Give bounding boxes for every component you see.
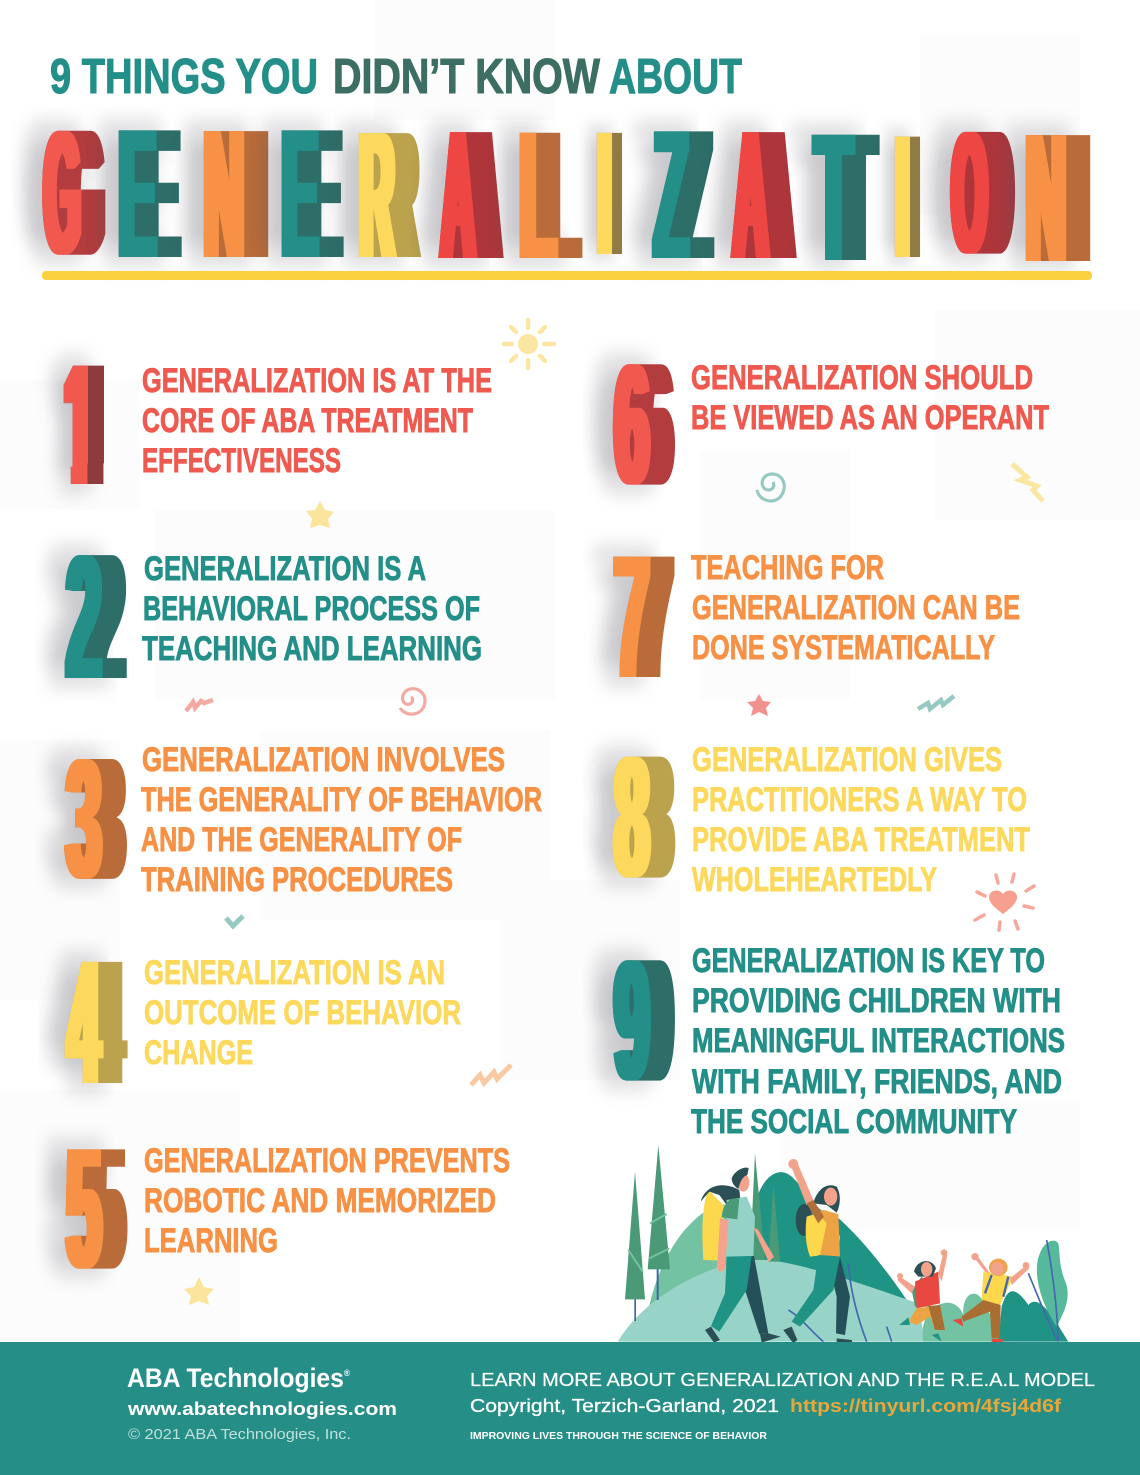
item 6 text [691, 359, 1049, 437]
item 5 text: LEARNING [144, 1222, 278, 1260]
item 9 text [691, 942, 1065, 1141]
item 3 [66, 724, 542, 913]
item 7 text: GENERALIZATION CAN BE [692, 589, 1020, 627]
icon: check [226, 916, 243, 926]
footer: website: www.abatechnologies.com [127, 1399, 397, 1419]
item 1 text: GENERALIZATION IS AT THE [142, 362, 492, 400]
item 6 text: GENERALIZATION SHOULD [691, 359, 1033, 397]
footer: tagline: IMPROVING LIVES THROUGH THE SCIENCE OF BEHAVIOR [470, 1430, 767, 1442]
item 7 text [691, 549, 1020, 667]
item 1 [64, 330, 492, 522]
item 8 text: GENERALIZATION GIVES [692, 741, 1002, 779]
item 6 [614, 330, 1049, 520]
icon: heart sun [975, 874, 1034, 930]
item 5 [66, 1113, 510, 1304]
item 7 text: TEACHING FOR [691, 549, 884, 587]
item 4 text: GENERALIZATION IS AN [144, 954, 445, 992]
icon: zigzag yellow [1012, 464, 1043, 501]
item 2 text [142, 550, 482, 668]
footer band [0, 1342, 1140, 1475]
item 1 text [142, 362, 492, 480]
3D word: GENERALIZATION: G [44, 96, 80, 291]
number 9: 9 [614, 926, 649, 1116]
footer: ABA logo text: ABA Technologies [127, 1363, 364, 1393]
3D word: GENERALIZATION: A [441, 94, 475, 298]
icon: sun [504, 320, 554, 368]
icon: star pink [747, 694, 771, 716]
number 6: 6 [614, 330, 649, 520]
icon: zigzag teal [918, 696, 954, 709]
title [50, 50, 742, 104]
item 3 text: THE GENERALITY OF BEHAVIOR [141, 781, 542, 819]
3D word: GENERALIZATION: Z [654, 91, 688, 297]
number 2: 2 [66, 518, 101, 715]
number 8: 8 [614, 722, 649, 913]
icon: star yellow [306, 501, 334, 528]
item 3 text: AND THE GENERALITY OF [141, 821, 462, 859]
item 8 text: PROVIDE ABA TREATMENT [692, 821, 1030, 859]
icon: spiral pink [400, 689, 425, 714]
item 3 text [141, 741, 542, 899]
item 8 text [692, 741, 1030, 899]
3D word: GENERALIZATION: A [733, 94, 768, 298]
item 8 text: WHOLEHEARTEDLY [692, 861, 937, 899]
footer: copyright author: Copyright, Terzich-Garland, 2021 [470, 1396, 779, 1416]
yellow underline [42, 271, 1092, 280]
number 7: 7 [614, 519, 649, 714]
item 2 text: BEHAVIORAL PROCESS OF [143, 590, 480, 628]
3D word: GENERALIZATION: O [952, 96, 987, 289]
man hiker [701, 1168, 781, 1343]
3D word: GENERALIZATION: T [815, 95, 852, 299]
item 2 [66, 518, 482, 715]
3D word: GENERALIZATION [44, 90, 1066, 300]
hills and trees [618, 1145, 1068, 1342]
item 4 text: CHANGE [144, 1034, 253, 1072]
footer: copyright: © 2021 ABA Technologies, Inc. [128, 1426, 351, 1443]
footer: ABA logo text: ® [344, 1368, 350, 1378]
title: ABOUT [609, 50, 742, 104]
woman hiker [783, 1159, 853, 1343]
item 5 text [144, 1142, 510, 1260]
3D word: GENERALIZATION: I [598, 96, 611, 292]
3D word: GENERALIZATION: N [1026, 96, 1066, 300]
boy [953, 1253, 1029, 1343]
number 1: 1 [64, 330, 94, 522]
girl [897, 1249, 947, 1342]
item 7 text: DONE SYSTEMATICALLY [692, 629, 995, 667]
item 3 text: GENERALIZATION INVOLVES [142, 741, 505, 779]
number 4: 4 [68, 923, 100, 1121]
3D word: GENERALIZATION: R [360, 94, 394, 295]
number 3: 3 [66, 724, 101, 913]
item 8 [614, 722, 1030, 913]
footer: learn more: LEARN MORE ABOUT GENERALIZATION AND THE R.E.A.L MODEL [470, 1370, 1095, 1390]
item 5 text: ROBOTIC AND MEMORIZED [144, 1182, 496, 1220]
item 9 text: THE SOCIAL COMMUNITY [691, 1103, 1017, 1141]
number 5: 5 [66, 1113, 101, 1304]
3D word: GENERALIZATION: I [896, 101, 909, 295]
item 4 [68, 923, 461, 1121]
illustration: hikers [618, 1145, 1068, 1343]
item 5 text: GENERALIZATION PREVENTS [144, 1142, 510, 1180]
3D word: GENERALIZATION: E [282, 90, 318, 296]
item 8 text: PRACTITIONERS A WAY TO [692, 781, 1027, 819]
item 4 text [144, 954, 461, 1072]
title: 9 THINGS YOU [50, 50, 318, 104]
item 2 text: GENERALIZATION IS A [144, 550, 426, 588]
icon: star yellow lower [184, 1277, 214, 1305]
3D word: GENERALIZATION: L [520, 93, 556, 297]
icon: squiggle pink [186, 700, 213, 711]
item 7 [614, 519, 1020, 714]
item 2 text: TEACHING AND LEARNING [142, 630, 482, 668]
item 1 text: CORE OF ABA TREATMENT [142, 402, 473, 440]
icon: zigzag orange [471, 1065, 511, 1085]
title: DIDN’T KNOW [333, 50, 601, 104]
icon: spiral teal [757, 474, 784, 501]
3D word: GENERALIZATION: E [119, 90, 156, 296]
item 3 text: TRAINING PROCEDURES [141, 861, 453, 899]
item 1 text: EFFECTIVENESS [142, 442, 341, 480]
item 4 text: OUTCOME OF BEHAVIOR [144, 994, 461, 1032]
item 9 [614, 926, 1065, 1141]
footer: link: https://tinyurl.com/4fsj4d6f [790, 1396, 1062, 1416]
3D word: GENERALIZATION: N [204, 92, 244, 296]
